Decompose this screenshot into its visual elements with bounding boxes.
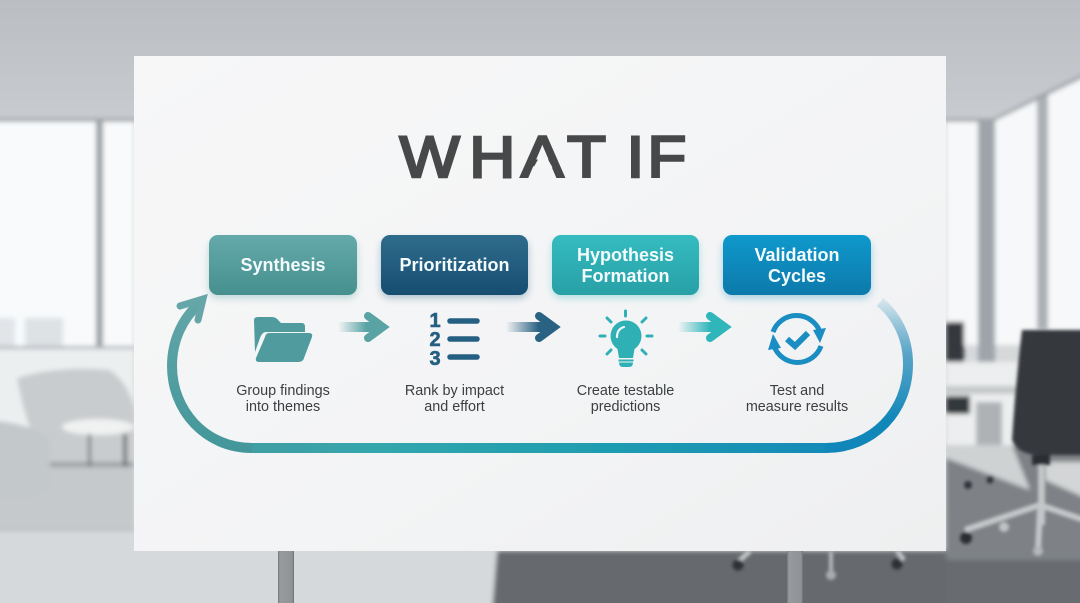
card: Validation Cycles: Validation <box>754 245 840 265</box>
arrow: prioritization to hypothesis <box>506 316 554 338</box>
card: Prioritization <box>381 235 528 298</box>
icon: folder <box>254 317 312 362</box>
icon: validation cycle <box>768 316 826 362</box>
description: group findings: into themes <box>246 399 320 415</box>
card: Synthesis <box>209 235 357 298</box>
title: WHAT IF <box>400 125 686 189</box>
feedback loop arrow <box>172 299 908 448</box>
icon: numbered list <box>429 310 477 370</box>
description: create testable <box>577 383 674 415</box>
description: create testable: Create testable <box>577 383 674 399</box>
right table and chairs <box>492 322 1080 603</box>
card: Synthesis: Synthesis <box>240 255 326 275</box>
description: group findings <box>236 383 330 415</box>
office chair <box>732 330 1080 580</box>
description: group findings: Group findings <box>236 383 330 399</box>
description: rank by impact: Rank by impact <box>405 383 504 399</box>
panel legs <box>278 548 803 603</box>
card: Hypothesis Formation: Hypothesis <box>577 245 674 265</box>
icon: numbered list: 2 <box>429 329 441 351</box>
card: Hypothesis Formation <box>552 235 699 298</box>
card: Validation Cycles <box>723 235 871 298</box>
icon: numbered list: 1 <box>429 310 441 332</box>
description: rank by impact: and effort <box>424 399 485 415</box>
left windows <box>0 120 134 350</box>
icon: light bulb <box>600 311 652 367</box>
card: Hypothesis Formation: Formation <box>582 266 670 286</box>
right windows <box>946 75 1080 363</box>
left lounge furniture <box>0 349 497 603</box>
card: Validation Cycles: Cycles <box>768 266 826 286</box>
arrow: synthesis to prioritization <box>338 316 383 338</box>
description: test and measure: measure results <box>746 399 848 415</box>
description: test and measure: Test and <box>770 383 824 399</box>
icon: numbered list: 3 <box>429 348 441 370</box>
card: Prioritization: Prioritization <box>399 255 510 275</box>
description: create testable: predictions <box>591 399 660 415</box>
description: rank by impact <box>405 383 504 415</box>
whiteboard panel <box>134 56 946 551</box>
description: test and measure <box>746 383 848 415</box>
arrow: hypothesis to validation <box>678 316 725 338</box>
ceiling <box>0 0 1080 120</box>
